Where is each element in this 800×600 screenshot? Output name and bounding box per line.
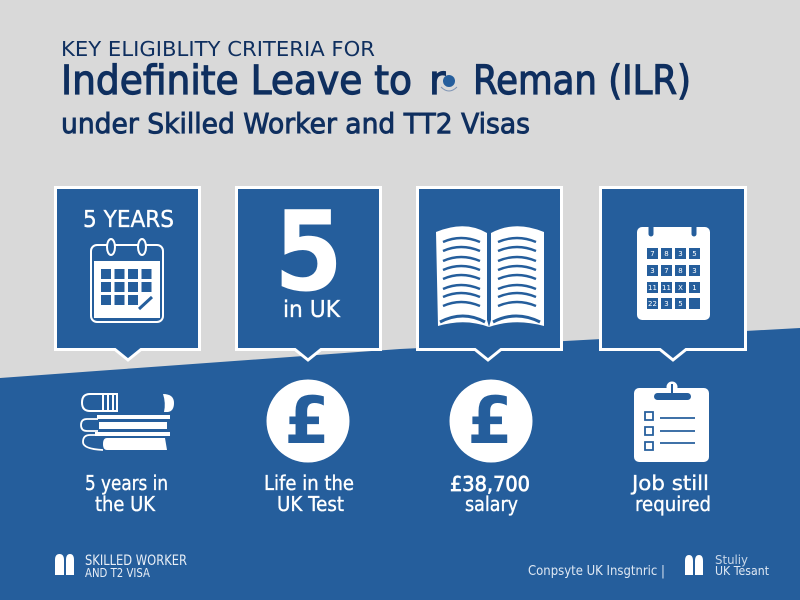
caption: £38,700: [450, 472, 530, 496]
large number 5: 5: [274, 188, 343, 317]
panel: 5 years calendar: [56, 188, 200, 360]
criterion: salary: salary: [465, 492, 518, 516]
panel: open book: [418, 188, 562, 360]
caption: 5 years in: [85, 471, 168, 495]
background: blue diagonal lower section: [0, 328, 800, 600]
icon: calendar with date grid: 3: [678, 250, 683, 258]
icon: twin pillars: [685, 555, 703, 575]
icon: calendar with date grid: 3: [664, 300, 669, 308]
icon: twin pillars: [55, 554, 74, 575]
icon: calendar with date grid: 11: [662, 284, 671, 292]
icon: calendar with date grid: 7: [650, 250, 655, 258]
title block: [61, 37, 691, 140]
icon: calendar with date grid: X: [678, 284, 683, 292]
footer credit: Conpsyte UK Insgtnric |: [528, 564, 665, 579]
caption: Life in the: [264, 471, 354, 495]
icon: wall calendar with pencil: [91, 239, 163, 322]
panel: date calendar: [600, 188, 746, 360]
footer: right brand: [528, 553, 769, 579]
icon: calendar with date grid: 8: [664, 250, 669, 258]
caption: Job still: [630, 471, 709, 495]
panel heading: 5 years: 5 YEARS: [83, 207, 174, 233]
eyebrow heading: KEY ELIGIBLITY CRITERIA FOR: [61, 37, 375, 61]
criterion: job still required: required: [635, 492, 711, 516]
main title: r: [429, 58, 446, 104]
criterion: salary: [450, 380, 532, 516]
criterion: job still required: [630, 382, 711, 516]
icon: pound coin: £: [284, 384, 330, 459]
footer: left brand: [55, 553, 187, 580]
main title: Indefinite Leave to: [61, 58, 412, 104]
icon: calendar with date grid: 22: [648, 300, 657, 308]
icon: calendar with date grid: 3: [692, 267, 697, 275]
footer: left brand: AND T2 VISA: [85, 566, 151, 580]
icon: calendar with date grid: 5: [678, 300, 683, 308]
icon: calendar with date grid: 11: [648, 284, 657, 292]
icon: calendar with date grid: [637, 227, 710, 320]
icon: open book: [436, 226, 544, 327]
icon: calendar with date grid: 7: [664, 267, 669, 275]
criterion: 5 years in the UK: [81, 394, 174, 516]
caption: in UK: in UK: [283, 297, 341, 323]
icon: stack of books: [81, 394, 174, 450]
footer: right brand: UK Tesant: [715, 564, 769, 578]
panel: 5 in UK: [236, 188, 380, 360]
main title: [61, 58, 691, 104]
criterion: 5 years in the UK: the UK: [95, 492, 156, 516]
criterion: Life in the UK Test: UK Test: [277, 492, 344, 516]
icon: pound coin: £: [467, 384, 513, 459]
icon: calendar with date grid: 3: [650, 267, 655, 275]
icon: calendar with date grid: 8: [678, 267, 683, 275]
icon: clipboard checklist: [634, 382, 709, 462]
footer label: SKILLED WORKER: [85, 553, 187, 569]
criterion: Life in the UK Test: [264, 380, 354, 516]
subtitle: under Skilled Worker and TT2 Visas: [61, 107, 530, 140]
main title: Reman (ILR): [473, 58, 691, 104]
icon: calendar with date grid: 5: [692, 250, 697, 258]
footer label: Stuliy: [715, 553, 748, 567]
icon: calendar with date grid: 1: [692, 284, 697, 292]
